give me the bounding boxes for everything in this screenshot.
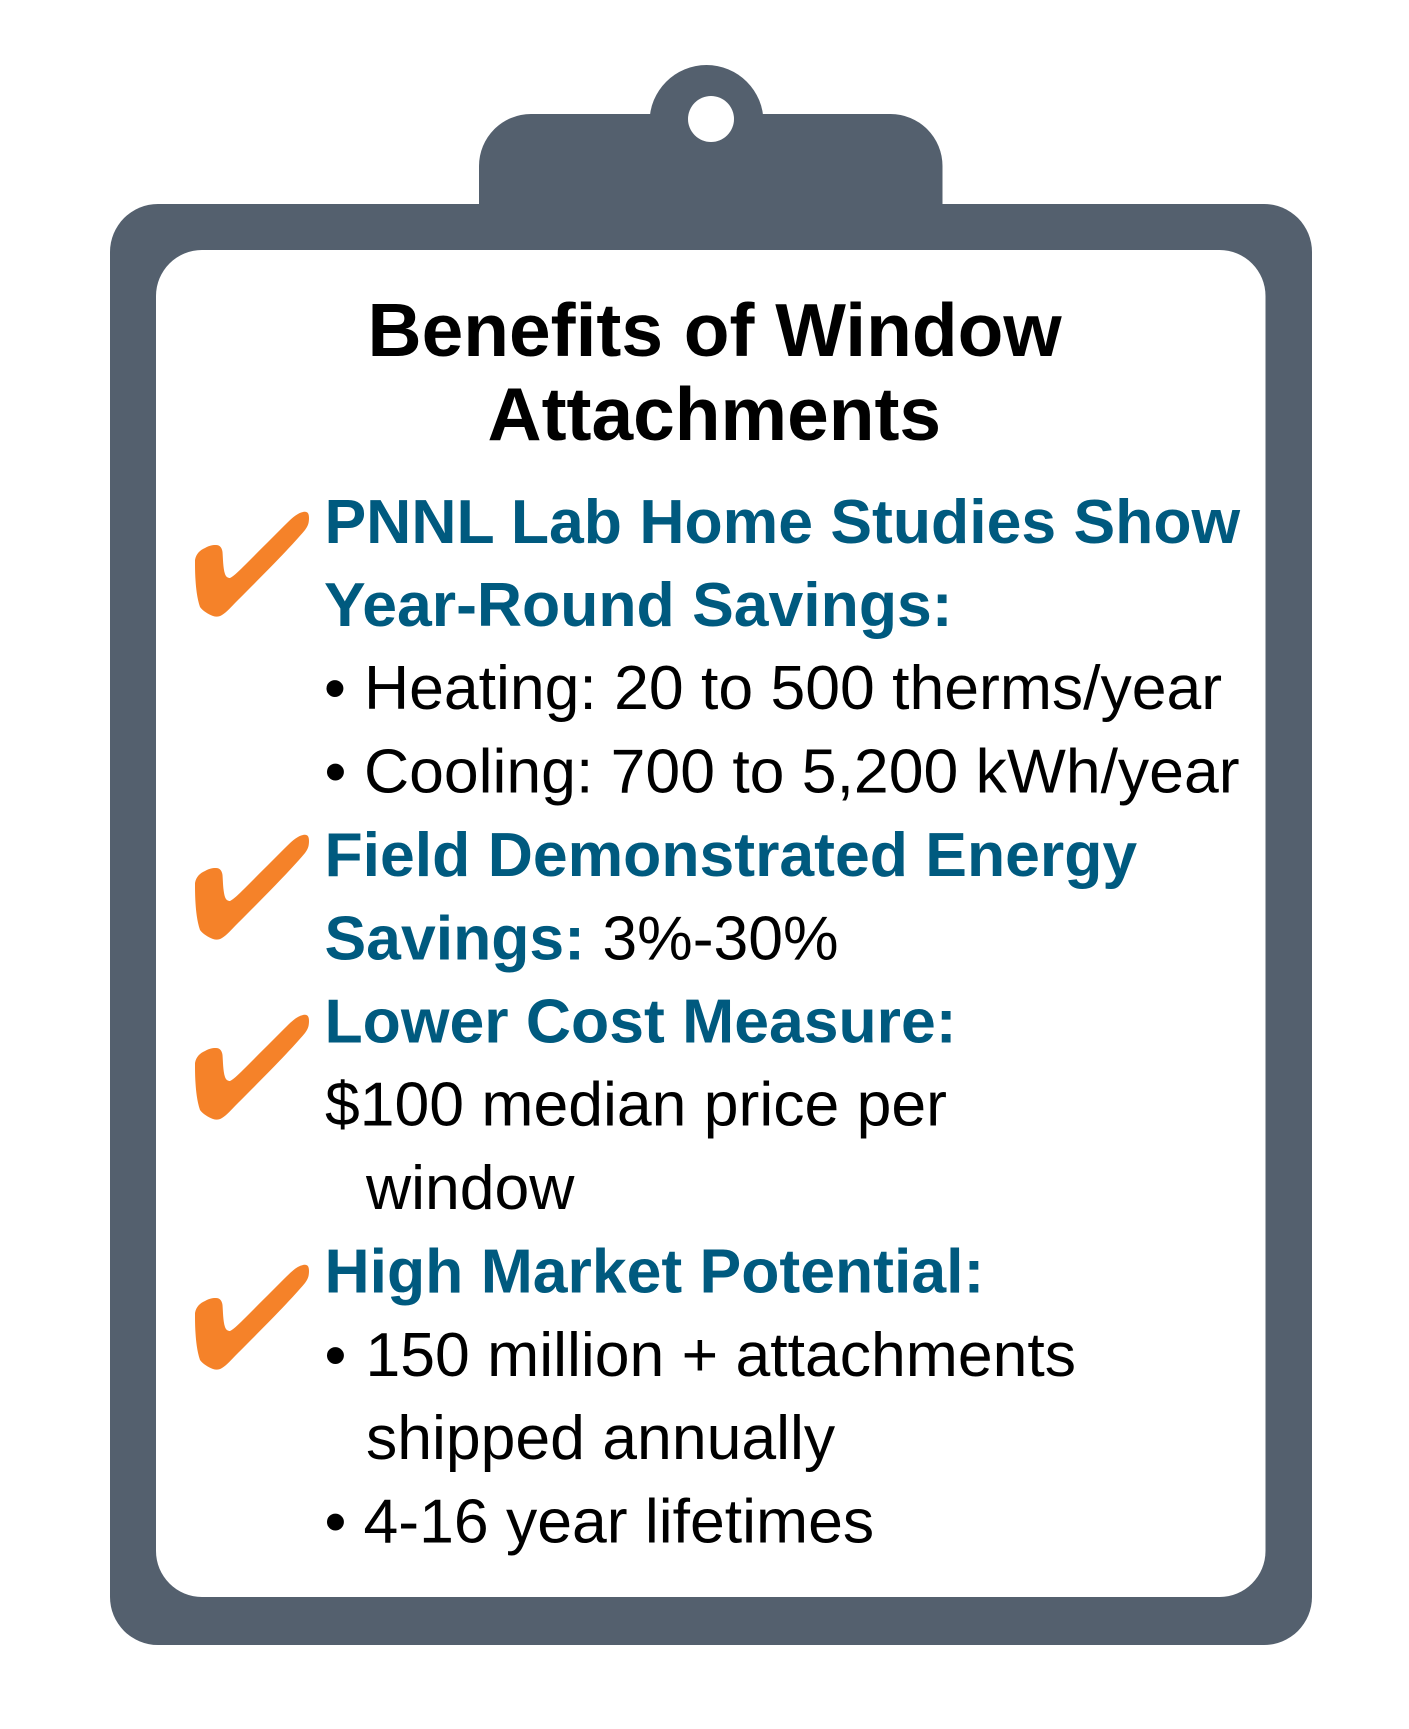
paper <box>156 250 1266 1597</box>
clipboard clip <box>479 114 942 260</box>
clipboard board <box>110 204 1312 1645</box>
check icon 4 <box>195 1265 309 1370</box>
section: lab home savings: PNNL Lab Home Studies Show <box>324 487 1241 557</box>
title <box>368 288 1062 456</box>
section: lower cost <box>324 986 957 1223</box>
section: market potential: shipped annually <box>366 1403 836 1473</box>
check icon 3 <box>195 1015 309 1120</box>
section: market potential: 4-16 year lifetimes <box>364 1486 874 1556</box>
section: field savings: Savings: 3%-30% <box>324 903 839 973</box>
section: lower cost: window <box>365 1153 575 1223</box>
section: lower cost: Lower Cost Measure: <box>324 986 957 1056</box>
title: Attachments <box>488 372 941 456</box>
section: market potential: High Market Potential: <box>324 1236 984 1306</box>
section: lab home savings: Year-Round Savings: <box>324 570 953 640</box>
section: lab home savings: Heating: 20 to 500 therms/year <box>364 653 1222 723</box>
section: market potential: • <box>324 1486 346 1556</box>
title: Benefits of Window <box>368 288 1062 372</box>
section: lab home savings: • <box>324 736 346 806</box>
check icon 1 <box>195 512 309 617</box>
section: field savings <box>324 820 1137 973</box>
section: lower cost: $100 median price per <box>325 1070 947 1140</box>
clipboard <box>110 65 1312 1645</box>
section: lab home savings: • <box>324 653 346 723</box>
section: field savings: Field Demonstrated Energy <box>324 820 1137 890</box>
check icon 2 <box>195 835 309 940</box>
section: lab home savings: Cooling: 700 to 5,200 kWh/year <box>364 736 1240 806</box>
section: market potential: 150 million + attachments <box>366 1320 1076 1390</box>
section: market potential <box>324 1236 1076 1556</box>
section: market potential: • <box>324 1320 346 1390</box>
clipboard hanger <box>650 65 764 179</box>
section: lab home savings <box>324 487 1241 806</box>
clip hole <box>688 96 734 142</box>
